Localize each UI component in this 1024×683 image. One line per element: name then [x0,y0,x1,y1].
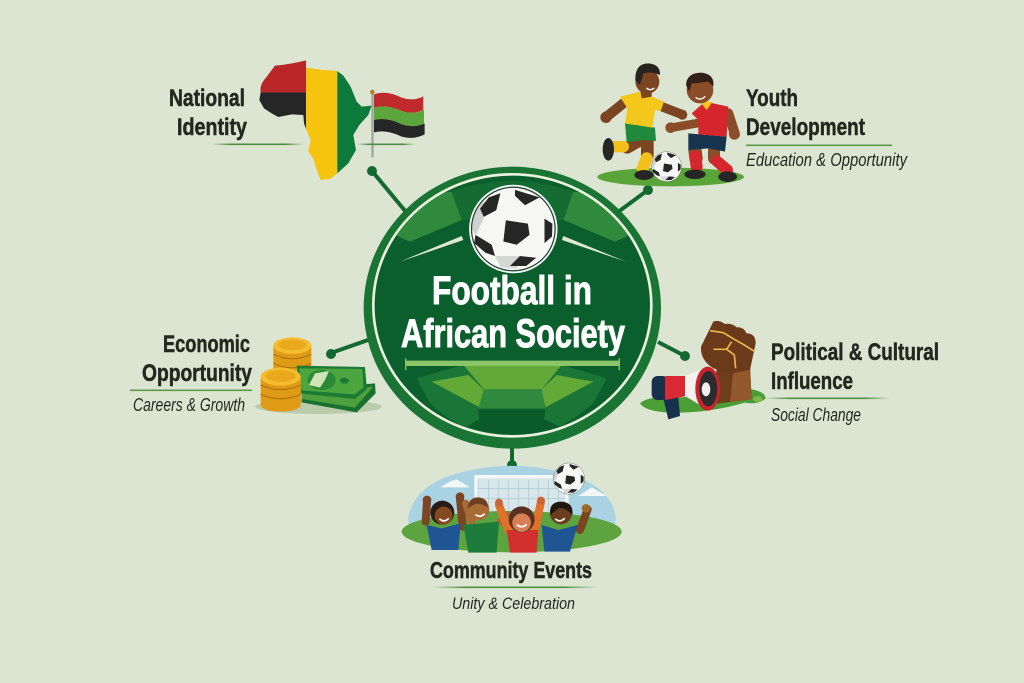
title: Football in [432,269,592,313]
fist [701,321,756,404]
label: National Identity: National [169,85,245,112]
central badge [364,167,661,449]
label: Youth Development [746,85,908,170]
label: Community Events: Community Events [430,557,592,583]
connectors [326,166,690,470]
fan 4 [542,502,590,552]
flying football [553,463,585,494]
label: Political & Cultural Influence: Political & Cultural [771,339,939,366]
label: Youth Development: Development [746,114,865,141]
grass [402,511,622,552]
label: Economic Opportunity: Careers & Growth [133,395,245,415]
label: Community Events: Unity & Celebration [452,594,575,613]
icon: coins and cash [255,337,382,414]
icon: youth players [597,63,744,186]
label: National Identity: Identity [177,114,248,141]
label: Political & Cultural Influence: Social Change [771,405,861,425]
label: Political & Cultural Influence: Influence [771,368,853,395]
fan 1 [423,492,464,550]
label: Economic Opportunity: Economic [163,331,250,358]
flag [370,90,425,157]
label: Economic Opportunity [130,331,253,415]
title: African Society [401,312,626,356]
goal [476,477,567,515]
badge football [470,186,557,272]
back coins [273,337,311,371]
badge top panels [396,181,628,262]
title [401,269,626,356]
label: Political & Cultural Influence [765,339,939,425]
label: Youth Development: Education & Opportunity [746,150,908,170]
icon: community celebration [402,463,622,553]
label: National Identity [169,85,415,145]
fans [423,492,590,553]
fan 3 [495,497,545,553]
label: Youth Development: Youth [746,85,798,112]
label: Community Events [430,557,597,613]
banknotes [297,366,376,412]
sky [408,466,616,533]
front coins [261,368,301,412]
label: Economic Opportunity: Opportunity [142,360,253,387]
megaphone [652,367,720,419]
icon: raised fist and megaphone [640,321,766,419]
badge pitch [405,358,620,438]
player in red [665,73,740,182]
player in yellow [600,63,687,180]
football [652,152,682,182]
icon: Africa map and flag [259,60,425,180]
fan 2 [463,497,507,553]
